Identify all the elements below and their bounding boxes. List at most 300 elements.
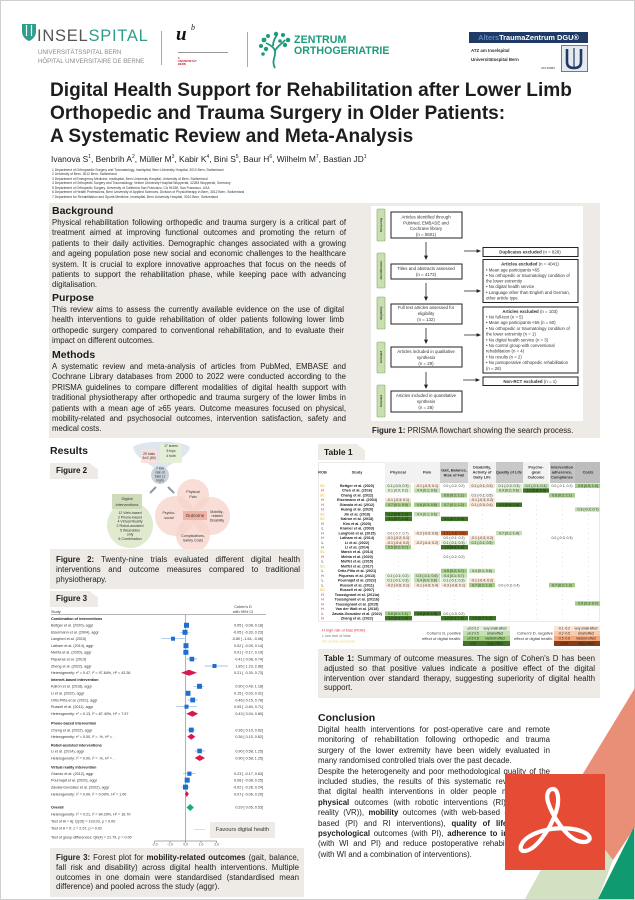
Table 1 summary of outcome measures: 1.0 (0.7; 1.2) <box>472 616 492 620</box>
methods text: PRISMA guidelines to compare different modalities of digital health support with <box>52 383 346 392</box>
Figure 2 diagram: Safety Costs <box>183 538 203 542</box>
Table 1 summary of outcome measures: 0.6 (0.1; 1.1) <box>388 612 408 616</box>
Table 1 caption <box>318 649 600 698</box>
Table 1 summary of outcome measures: Piqueras et al. (2013) <box>339 574 376 578</box>
Figure 3 forest plot: Cohen's D <box>234 605 252 609</box>
Table 1 legend: -0.2 -0.5 <box>558 632 570 636</box>
Figure 3 forest plot: Heterogeneity: τ² = 0.00, I² = .%, H² = . <box>51 756 114 760</box>
Figure 3 forest plot: 1.0 <box>199 842 203 846</box>
conclusion text: that digital health interventions in older people may improve <box>318 787 550 796</box>
Table 1 summary of outcome measures: 0.2 (-0.1; 0.4) <box>525 484 547 488</box>
Figure 3 tab: Figure 3 <box>56 594 87 603</box>
Table 1 summary of outcome measures: Pournajaf et al. (2022) <box>338 579 377 583</box>
Figure 3 forest plot: 0.02 [ -0.09, 0.14] <box>234 644 263 648</box>
Table 1 tab: Table 1 <box>324 447 353 457</box>
Table 1 summary of outcome measures: Kalron et al. (2018) <box>341 517 374 521</box>
Table 1 summary of outcome measures: H <box>321 522 324 526</box>
Table 1 legend: medium effect <box>485 637 505 641</box>
Table 1 summary of outcome measures: ------ <box>427 546 590 550</box>
Table 1 summary of outcome measures: 0.6 (0.2; 1.1) <box>552 494 572 498</box>
Figure 3 forest plot: -2.0 <box>152 842 158 846</box>
Table 1 summary of outcome measures: -0.1 (-0.3; 0.1) <box>416 484 438 488</box>
Figure 3 forest plot: Robot-assisted interventions <box>51 743 102 747</box>
Table 1 summary of outcome measures: 0.3 (-0.1; 0.6) <box>416 574 438 578</box>
PRISMA flowchart: Articles excluded (n = 4041) <box>501 262 559 266</box>
Table 1 summary of outcome measures: -1.1 (-1.8; -0.5) <box>442 531 466 535</box>
Table 1 summary of outcome measures: H <box>321 503 324 507</box>
Table 1 legend <box>322 626 600 646</box>
Table 1 summary of outcome measures: 0.0 (-0.1; 0.2) <box>551 484 573 488</box>
heading: results: Results <box>50 445 88 457</box>
Figure 3 forest plot: Study <box>51 610 61 614</box>
Figure 3 forest plot: Kalron et al. (2018), aggr <box>51 685 93 689</box>
Table 1 caption: adjusted so that positive values indicate a positive effect of the digital <box>324 664 595 673</box>
Table 1 summary of outcome measures: Latham et al. (2014) <box>340 536 375 540</box>
Table 1 legend: L low risk of bias <box>322 633 351 638</box>
Table 1 summary of outcome measures: 0.6 (0.3; 0.8) <box>417 503 437 507</box>
Figure 3 forest plot: Heterogeneity: τ² = 0.13, I² = 87.40%, H² = 7.97 <box>51 712 128 716</box>
Figure 3 forest plot: Li et al. (2014), aggr <box>51 749 85 753</box>
university name <box>178 56 197 66</box>
Table 1 legend: Cohen's D, negative <box>517 630 554 636</box>
Figure 3 forest plot: 0.08 [ -0.08, 0.25] <box>234 778 263 782</box>
conclusion text <box>318 725 550 859</box>
Figure 2 diagram: Disability <box>210 518 224 522</box>
Table 1 summary of outcome measures: -------- <box>398 560 590 564</box>
Figure 3 forest plot: 0.05 [ -0.08, 0.18] <box>234 624 263 628</box>
Table 1 summary of outcome measures: H <box>321 498 324 502</box>
PRISMA flowchart: Identification <box>379 261 383 279</box>
Table 1 summary of outcome measures: Pain <box>423 470 432 474</box>
conclusion text: included studies, the results of this systematic review showed <box>318 777 550 786</box>
Figure 2 caption: Figure 2: Twenty-nine trials evaluated different digital health <box>56 555 300 564</box>
Table 1 summary of outcome measures: H <box>321 593 324 597</box>
Table 1 summary of outcome measures: Russell et al. (2007) <box>340 588 375 592</box>
Table 1 summary of outcome measures: SC <box>320 494 325 498</box>
authors: Ivanova S1, Benbrih A2, Müller M3, Kabir K4, Bini S5, Baur H6, Wilhelm M7, Bastian JD1 <box>51 154 367 164</box>
heading: conclusion: Conclusion <box>318 712 375 724</box>
logo: Zentrum Orthogeriatrie <box>259 32 390 68</box>
Figure 3 forest plot: 0.0 <box>183 842 188 846</box>
Figure 2 diagram: Psycho- <box>163 511 176 515</box>
Figure 3 forest plot: 0.01 [ -0.17, 0.19] <box>234 651 263 655</box>
PRISMA flowchart: Duplicates excluded (n = 828) <box>499 250 561 255</box>
methods text: A systematic review and meta-analysis of articles from PubMed, EMBASE and <box>52 362 346 371</box>
Figure 3 forest plot: 0.90 [ 0.58, 1.25] <box>235 749 263 753</box>
Table 1 summary of outcome measures: ------ <box>398 569 590 573</box>
Table 1 legend: -0.1 -0.2 <box>558 627 570 631</box>
PRISMA flowchart: • Mean age participants <65 <box>486 268 540 272</box>
wordmark: ORTHOGERIATRIE <box>294 45 389 57</box>
title <box>50 80 572 147</box>
Table 1 summary of outcome measures: 0.4 (0.2; 0.6) <box>499 489 519 493</box>
Figure 3 forest plot: 0.36 [ 0.10, 0.62] <box>235 728 263 732</box>
Table 1 summary of outcome measures: Marsh et al. (2014) <box>341 550 374 554</box>
Table 1 summary of outcome measures: H <box>321 555 324 559</box>
Table 1 summary of outcome measures: H <box>321 531 324 535</box>
Table 1 summary of outcome measures: 0.1 (-0.1; 0.3) <box>443 579 465 583</box>
Table 1 legend: very small effect <box>575 627 598 631</box>
Table 1 summary of outcome measures: 0.0 (-0.2; 0.2) <box>443 484 465 488</box>
Figure 3 forest plot: -0.05 [ -0.33, 0.23] <box>233 631 263 635</box>
background text: system. It is crucial to explore innovative approaches that focus on the needs of <box>52 260 346 269</box>
Table 1 summary of outcome measures: Costs <box>583 470 593 474</box>
Table 1 summary of outcome measures: L <box>321 569 324 573</box>
Table 1 caption: intervention over standard therapy, suggesting superiority of digital health <box>324 674 595 683</box>
Table 1 summary of outcome measures: adherence, <box>552 470 572 474</box>
Table 1 summary of outcome measures: 0.8 (0.5; 1.0) <box>578 484 598 488</box>
Table 1 summary of outcome measures: L <box>321 583 324 587</box>
Table 1 legend: -0.5 -0.8 <box>558 637 570 641</box>
Table 1 summary of outcome measures: ------ <box>427 498 590 502</box>
Figure 2 diagram: only <box>127 532 133 536</box>
conclusion text: (with WI and a combination of interventions). <box>318 850 472 859</box>
Table 1 summary of outcome measures: Outcome <box>528 474 545 480</box>
Table 1 summary of outcome measures: Moffet et al. (2015) <box>341 560 374 564</box>
Figure 2 diagram: 17 knees <box>164 444 178 448</box>
Table 1 summary of outcome measures: Huang et al. (2020) <box>341 508 374 512</box>
PRISMA flowchart: • No postoperative orthopedic rehabilitation <box>486 360 569 365</box>
Figure 3 forest plot: 0.07 [ -0.06, 0.20] <box>234 792 263 796</box>
Table 1 summary of outcome measures: ------- <box>398 602 564 606</box>
Table 1 summary of outcome measures: 1.1 (0.7; 1.4) <box>388 517 408 521</box>
Table 1 summary of outcome measures: Eisermann et al. (2004) <box>337 498 378 502</box>
PRISMA flowchart: (n = 5501) <box>416 232 437 237</box>
Table 1 summary of outcome measures: 1.1 (0.7; 1.4) <box>444 517 464 521</box>
Figure 2 diagram: 6 Combination <box>118 537 142 541</box>
Table 1 summary of outcome measures: 1.1 (0.8; 1.4) <box>526 489 546 493</box>
PRISMA flowchart: • Language other than English and German, <box>486 290 570 295</box>
Figure 3 forest plot: Virtual reality intervention <box>51 765 97 769</box>
Figure 3 forest plot: -0.80 [ -1.54, -0.06] <box>232 637 263 641</box>
Table 1 summary of outcome measures: Kramer et al. (2003) <box>340 527 375 531</box>
Table 1 summary of outcome measures: -0.1 (-0.4; 0.2) <box>471 579 493 583</box>
Table 1 summary of outcome measures: --- <box>536 503 590 507</box>
Table 1 summary of outcome measures: Psycho- <box>528 464 544 470</box>
Table 1 summary of outcome measures: 0.1 (-0.1; 0.3) <box>443 541 465 545</box>
Table 1 summary of outcome measures: Zavala-González et al. (2022) <box>332 612 383 616</box>
Table 1 summary of outcome measures: ----- <box>398 494 590 498</box>
Figure 2 diagram: 3 Phone-based <box>118 515 142 519</box>
Table 1 summary of outcome measures: Chen et al. (2016) <box>342 489 373 493</box>
Table 1 summary of outcome measures: -------- <box>398 522 590 526</box>
Table 1 summary of outcome measures: SC <box>320 588 325 592</box>
Table 1 tab <box>318 444 365 460</box>
Figure 3 forest plot: Test of group differences: Qb(4) = 21.79, p = 0.00 <box>51 835 132 839</box>
Table 1 legend: ≥0.8 <box>470 642 476 646</box>
Table 1 summary of outcome measures: -0.2 (-0.9; 0.6) <box>416 531 438 535</box>
centre name: ATZ am Inselspital <box>471 48 509 53</box>
Table 1 summary of outcome measures: Bettger et al. (2020) <box>340 484 375 488</box>
Figure 2 diagram: Complications, <box>181 534 205 538</box>
Table 1 summary of outcome measures: 0.1 (-0.1; 0.3) <box>387 579 409 583</box>
conclusion text: surgery of the lower extremity have been widely evaluated in <box>318 746 550 755</box>
Figure 3 forest plot: with 95% CI <box>233 610 253 614</box>
Table 1 summary of outcome measures: 0.4 (0.1; 0.7) <box>444 574 464 578</box>
Table 1 summary of outcome measures: -------- <box>398 527 590 531</box>
Table 1 summary of outcome measures: SC <box>320 484 325 488</box>
Table 1 summary of outcome measures: ----- <box>482 574 590 578</box>
conclusion text: Digital health interventions for post-operative care and remote <box>318 725 550 734</box>
PRISMA flowchart: (n = 4173) <box>416 272 437 277</box>
Figure 3 forest plot: Li et al. (2022), aggr <box>51 692 85 696</box>
Table 1 summary of outcome measures: H <box>321 574 324 578</box>
Figure 2 diagram: 2 Robot-assisted <box>117 524 143 528</box>
Table 1 summary of outcome measures: Chang et al. (2022) <box>341 494 374 498</box>
Table 1 summary of outcome measures: -0.2 (-0.4; 0.2) <box>416 541 438 545</box>
PRISMA flowchart: • Mean age participants <65 (n = 60) <box>486 320 556 325</box>
Table 1 summary of outcome measures: H <box>321 616 324 620</box>
Figure 3 forest plot: 0.90 [ 0.49, 1.18] <box>235 685 263 689</box>
Figure 2 caption: physiotherapy. <box>56 575 107 584</box>
Table 1 summary of outcome measures: 1.0 (0.5; 1.5) <box>417 612 437 616</box>
conclusion text: physical outcomes (with robotic interventions (RI) and virtual <box>318 798 550 807</box>
Figure 3 forest plot: Heterogeneity: τ² = 0.47, I² = 97.84%, H² = 43.36 <box>51 671 130 675</box>
Table 1 legend: effect of digital health: <box>514 636 553 641</box>
Table 1 summary of outcome measures: Langford et al. (2015) <box>338 531 376 535</box>
Table 1 summary of outcome measures: 0.7 (0.2; 1.2) <box>472 583 492 587</box>
PRISMA flowchart: other article type <box>486 296 518 300</box>
Table 1 summary of outcome measures: SC <box>320 550 325 554</box>
Figure 2 diagram <box>107 442 230 549</box>
background text: patients to support the rehabilitation phase, while keeping pace with advancing <box>52 270 346 279</box>
Figure 3 forest plot: Russell et al. (2011), aggr <box>51 705 94 709</box>
Table 1 summary of outcome measures: -- <box>536 583 590 587</box>
Figure 3 forest plot: Zavala-González et al. (2022), aggr <box>51 785 110 789</box>
Table 1 summary of outcome measures: ---- <box>482 531 590 535</box>
Figure 3 forest plot: 0.15 [ -0.03, 0.31] <box>234 692 263 696</box>
Figure 2 diagram: risk of <box>155 470 165 474</box>
Table 1 caption: support. <box>324 683 353 692</box>
Table 1 summary of outcome measures: Ortiz-Piña et al. (2021) <box>338 569 377 573</box>
Figure 2 diagram: 7 low <box>156 466 165 470</box>
PRISMA flowchart: Articles included in quantitative <box>396 393 457 398</box>
Figure 2 diagram: interventions <box>116 502 138 507</box>
PRISMA flowchart: Articles excluded (n = 103) <box>502 309 558 314</box>
icon: Inselspital shield <box>22 24 36 41</box>
Figure 3 forest plot: Latham et al. (2014), aggr <box>51 644 94 648</box>
Figure 3 forest plot: Mehta et al. (2020), aggr <box>51 651 92 655</box>
Table 1 summary of outcome measures: ------- <box>398 555 590 559</box>
favours digital health label: Favours digital health <box>216 827 269 833</box>
Figure 3 forest plot: 2.0 <box>214 842 219 846</box>
Figure 3 forest plot: Pournajaf et al. (2020), aggr <box>51 778 98 782</box>
purpose text: health interventions to guide rehabilitation of older patients following lower limb <box>52 315 344 324</box>
Table 1 legend: ≥0.5 0.8 <box>467 637 479 641</box>
Figure 3 forest plot: Piqueras et al. (2013) <box>51 657 86 661</box>
Table 1 summary of outcome measures: Moffet et al. (2017) <box>341 564 374 568</box>
Table 1 summary of outcome measures: -------- <box>398 564 590 568</box>
Figure 3 forest plot: Combination of interventions <box>51 617 102 621</box>
Table 1 summary of outcome measures: 0.6 (0.2; 1.1) <box>444 494 464 498</box>
Table 1 legend: Cohen's D, positive <box>427 630 462 636</box>
PRISMA flowchart: • No control group with conventional <box>486 343 555 348</box>
Table 1 summary of outcome measures: 0.7 (0.1; 1.2) <box>444 503 464 507</box>
Table 1 legend: large effect <box>578 642 594 646</box>
Table 1 summary of outcome measures: Activity of <box>473 470 492 474</box>
affiliations: 6 Department of Health Professions, Bern University of Applied Sciences, Division of Physiotherapy in Bern, 3012 Bern, Switzerland <box>52 190 244 194</box>
Table 1 legend: small effect <box>578 632 594 636</box>
centre name: Universitätsspital Bern <box>471 56 519 62</box>
title: A Systematic Review and Meta-Analysis <box>50 126 413 147</box>
wordmark: ZENTRUM <box>294 34 346 46</box>
Table 1 summary of outcome measures: Toussignant et al. (2015) <box>336 602 379 606</box>
wordmark: INSELSPITAL <box>37 27 149 45</box>
superscript b: b <box>191 23 195 32</box>
purpose text: This review aims to assess the currently available evidence on the use of digital <box>52 305 344 314</box>
Figure 3 forest plot: Bettger et al. (2020), aggr <box>51 624 94 628</box>
Table 1 summary of outcome measures: 0.4 (0.0; 0.8) <box>417 579 437 583</box>
Table 1 summary of outcome measures: SC <box>320 517 325 521</box>
Figure 2 diagram: 3n/2 (80) <box>142 456 156 460</box>
Table 1 summary of outcome measures: L <box>321 612 324 616</box>
Table 1 summary of outcome measures: 0.5 (0.2; 0.7) <box>388 546 408 550</box>
Table 1 summary of outcome measures: 0.4 (0.1; 0.6) <box>472 569 492 573</box>
Table 1 summary of outcome measures: L <box>321 579 324 583</box>
Table 1 summary of outcome measures: ---- <box>509 541 590 545</box>
Table 1 summary of outcome measures: 0.1 (-0.3; 0.4) <box>471 503 493 507</box>
Table 1 summary of outcome measures: 0.7 (0.2; 1.2) <box>552 583 572 587</box>
Table 1 summary of outcome measures: H <box>321 508 324 512</box>
PRISMA flowchart: PubMed, EMBASE and <box>403 220 449 226</box>
panel: purpose <box>52 292 344 345</box>
Table 1 summary of outcome measures: -0.1 (-0.3; 0.2) <box>471 536 493 540</box>
Table 1 summary of outcome measures: -------- <box>398 588 590 592</box>
methods text: Cochrane Library databases from 2000 to 2022 were conducted according to the <box>52 372 346 381</box>
methods text: medical costs. <box>52 424 101 433</box>
heading: purpose: Purpose <box>52 292 94 304</box>
Table 1 summary of outcome measures: Physical <box>390 470 406 474</box>
Figure 3 forest plot: Langford et al. (2015) <box>51 637 86 641</box>
PRISMA flowchart: • No orthopedic or traumatology condition of <box>486 273 570 278</box>
Figure 3 forest plot: Phone-based intervention <box>51 722 97 726</box>
panel: introduction and PRISMA background <box>49 203 600 438</box>
PRISMA flowchart: • No full-text (n = 5) <box>486 314 524 320</box>
Table 1 summary of outcome measures: Compliance <box>551 474 574 480</box>
Table 1 summary of outcome measures: Gait, Balance, <box>441 468 467 472</box>
Table 1 summary of outcome measures: 0.0 (-0.2; 0.2) <box>443 555 465 559</box>
Table 1 summary of outcome measures: L <box>321 541 324 545</box>
conclusion text: Despite the heterogeneity and poor methodological quality of the <box>318 767 550 776</box>
Table 1 legend: effect of digital health: <box>422 636 461 641</box>
Figure 2 diagram: 4 Virtual Reality <box>117 520 143 524</box>
Table 1 summary of outcome measures: 0.1 (-0.0; 0.3) <box>387 484 409 488</box>
Table 1 summary of outcome measures: ------ <box>427 517 590 521</box>
Figure 3 forest plot: Eisermann et al. (2004), aggr <box>51 631 100 635</box>
methods text <box>52 362 346 433</box>
PRISMA flowchart: synthesis <box>417 355 436 360</box>
Table 1 summary of outcome measures: 1.1 (0.6; 1.5) <box>499 503 519 507</box>
Table 1 summary of outcome measures: Risk of Fall <box>444 472 464 478</box>
PRISMA flowchart: • No digital health service <box>486 284 535 289</box>
background text: Physical rehabilitation following orthopedic and trauma surgery is a critical part of <box>52 218 346 227</box>
purpose text: impact on different outcomes. <box>52 336 154 345</box>
Table 1 summary of outcome measures: gical <box>532 470 540 474</box>
Table 1 summary of outcome measures: -0.3 (-0.8; 0.1) <box>443 583 465 587</box>
Table 1 summary of outcome measures: -0.2 (-0.6; 0.1) <box>387 583 409 587</box>
Table 1 summary of outcome measures: H <box>321 489 324 493</box>
Figure 3 forest plot: -0.02 [ -0.28, 0.24] <box>233 785 263 789</box>
Table 1 summary of outcome measures: 0.5 (0.3; 0.7) <box>578 602 598 606</box>
Figure 3 forest plot: Internet-based intervention <box>51 678 99 682</box>
Table 1 summary of outcome measures: 0.1 (-0.1; 0.2) <box>387 574 409 578</box>
title: Digital Health Support for Rehabilitation after Lower Limb <box>50 80 572 101</box>
Figure 3 caption: Figure 3: Forest plot for mobility-related outcomes (gait, balance, <box>56 853 299 862</box>
Figure 3 forest plot: Heterogeneity: τ² = 0.00, I² = .%, H² = . <box>51 735 114 739</box>
Table 1 summary of outcome measures: 0.7 (0.1; 0.9) <box>388 503 408 507</box>
Figure 2 diagram: 29 trials <box>143 452 155 456</box>
Figure 2 diagram: 8 hips <box>166 449 176 453</box>
Table 1 summary of outcome measures: H <box>321 607 324 611</box>
Figure 2 diagram: social <box>164 516 174 520</box>
Figure 2 diagram: 12 Web-based <box>118 511 142 515</box>
Figure 3 forest plot: Ortiz-Piña et al. (2021), aggr <box>51 698 98 702</box>
Table 1 summary of outcome measures: 0.3 (-0.2; 0.7) <box>577 508 599 512</box>
Table 1 summary of outcome measures: 0.0 (-0.7; 0.7) <box>387 531 409 535</box>
Figure 2 diagram: 5 Wearables <box>120 528 140 532</box>
Table 1 summary of outcome measures: -0.1 (-0.4; 0.2) <box>387 541 409 545</box>
Figure 3 forest plot: 0.23 [ -0.17, 0.63] <box>234 772 263 776</box>
Figure 3 forest plot <box>51 605 266 846</box>
Table 1 summary of outcome measures: Li et al. (2014) <box>345 546 370 550</box>
Figure 3 forest plot: Overall <box>51 805 64 809</box>
panel: methods <box>52 349 346 433</box>
Table 1 summary of outcome measures: Daily Life <box>473 474 491 480</box>
PRISMA flowchart: rehabilitation (n = 4) <box>486 348 525 354</box>
logo: AltersTraumaZentrum DGU <box>469 32 588 72</box>
Table 1 caption: Table 1: Summary of outcome measures. The sign of Cohen's D has been <box>324 654 595 663</box>
Figure 2 diagram: related <box>212 514 222 518</box>
PRISMA flowchart: (n = 28) <box>418 405 434 410</box>
Figure 3 forest plot: 1.85 [ 1.23, 2.86] <box>235 664 263 668</box>
Table 1 summary of outcome measures: 1.2 (0.8; 1.7) <box>388 512 408 516</box>
PRISMA flowchart: • No results (n = 2) <box>486 354 522 360</box>
PRISMA flowchart: synthesis <box>417 399 436 404</box>
affiliations: 5 Department of Orthopedic Surgery, University of California San Francisco, CA 94158, San Francisco, USA <box>52 186 210 190</box>
Figure 3 forest plot: 0.46 [ 0.15, 0.78] <box>235 698 263 702</box>
Table 1 summary of outcome measures: 0.1 (0.0; 0.2) <box>388 489 408 493</box>
affiliations <box>52 168 244 199</box>
methods text: patients with a mean age of ≥65 years. Outcome measures focused on physical, <box>52 404 346 413</box>
PRISMA flowchart: • No digital health service (n = 3) <box>486 338 549 342</box>
Figure 3 forest plot: Heterogeneity: τ² = 0.00, I² = 0.00%, H² = 1.00 <box>51 792 126 796</box>
Table 1 legend: very small effect <box>484 627 507 631</box>
Table 1 summary of outcome measures: H <box>321 546 324 550</box>
conclusion text: reality (VR)), mobility outcomes (with web-based (WI), phone- <box>318 808 550 817</box>
PRISMA flowchart: Non-RCT excluded (n = 1) <box>503 379 557 384</box>
Figure 3 caption <box>50 848 304 897</box>
decorative corner shapes <box>525 688 635 899</box>
wordmark <box>294 34 390 57</box>
Table 1 summary of outcome measures: Intervention <box>551 464 574 470</box>
affiliations: 7 Department for Rehabilitation and Sports Medicine, Inselspital, Bern University Hospital, 3010 Bern, Switzerland <box>52 195 218 199</box>
Table 1 summary of outcome measures: ---- <box>427 536 590 540</box>
Table 1 summary of outcome measures: Mehta et al. (2020) <box>341 555 374 559</box>
Table 1 summary of outcome measures: L <box>321 560 324 564</box>
Table 1 summary of outcome measures: -------- <box>398 593 590 597</box>
Table 1 summary of outcome measures: Toussignant et al. (2011a) <box>335 593 380 597</box>
Table 1 summary of outcome measures: 1.2 (0.9; 1.4) <box>388 616 408 620</box>
Table 1 summary of outcome measures: 0.4 (0.1; 0.6) <box>417 489 437 493</box>
icon: DGU seal <box>561 45 588 72</box>
Figure 2 diagram: Outcome <box>186 513 205 518</box>
methods text: mobility-related and psychosocial outcomes, intervention satisfaction, safety and <box>52 414 346 423</box>
Table 1 summary of outcome measures: 0.0 (-0.3; 0.3) <box>551 536 573 540</box>
Figure 2 diagram: Pain <box>189 495 197 499</box>
Table 1 summary of outcome measures: 0.0 (-0.1; 0.2) <box>443 536 465 540</box>
Table 1 summary of outcome measures: ---- <box>509 579 590 583</box>
Figure 3 caption: outcomes in one domain were standardised (standardised mean <box>56 873 299 882</box>
